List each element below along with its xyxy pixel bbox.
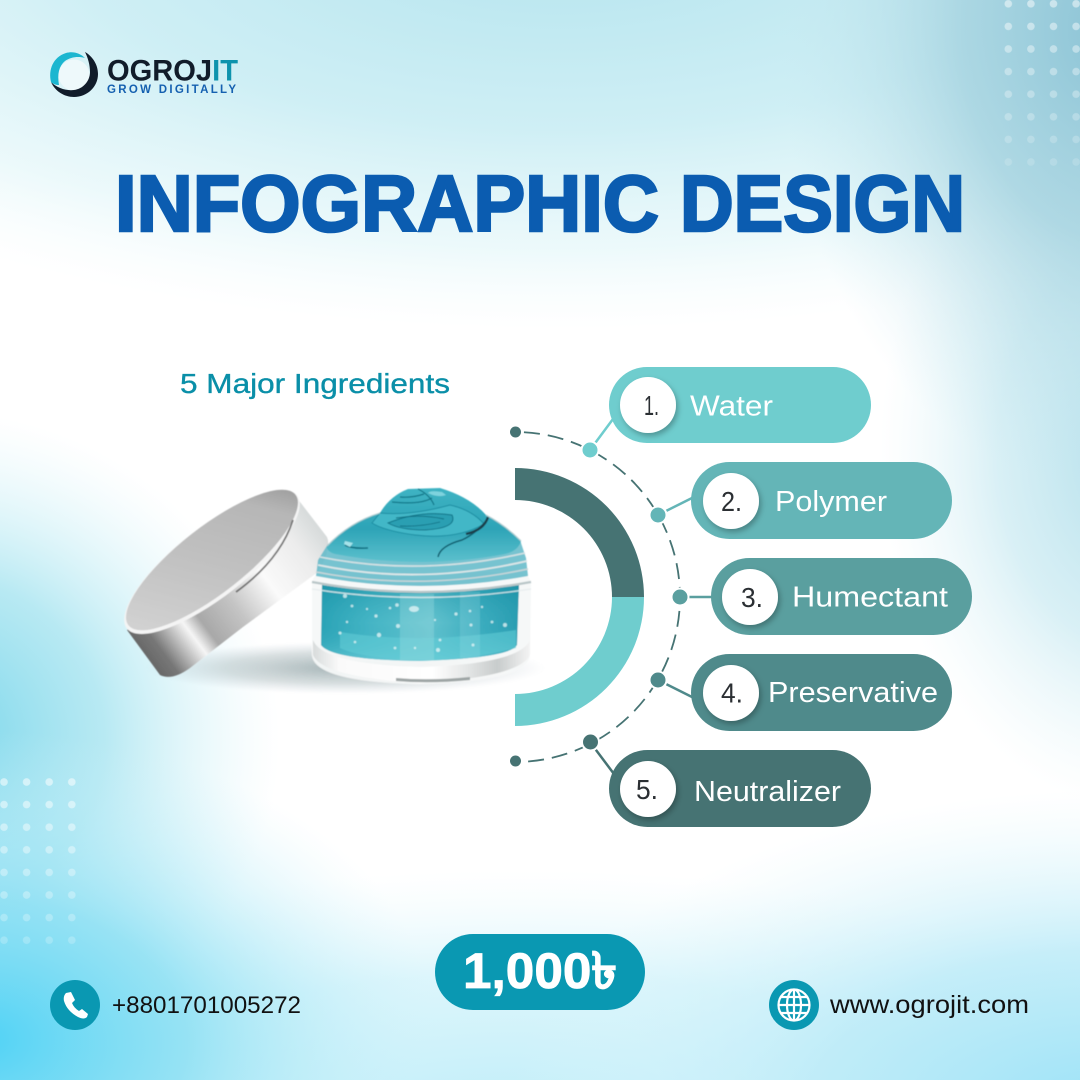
item 3: Humectant: Humectant [792,582,948,614]
product: gel jar with open lid [105,468,545,695]
item 2: Polymer: 2. [721,486,742,517]
item 1: Water: 1. [644,390,659,421]
item 2: Polymer [650,462,952,539]
decorative dot grid: top right [1004,0,1080,166]
title [115,159,965,248]
subtitle: 5 Major Ingredients: 5 Major Ingredients [180,368,450,399]
title: DESIGN [680,159,965,248]
price badge: 1,000৳ [463,943,617,999]
arc end dot bottom [510,756,521,766]
item 1: Water: Water [690,390,773,422]
contact: phone [50,980,301,1030]
item 3: Humectant: 3. [741,582,763,613]
ring: lower light segment [515,597,644,726]
item 1: Water [582,367,871,458]
item 3: Humectant [672,558,972,635]
website address: www.ogrojit.com [829,991,1029,1019]
jar shadow [145,640,545,695]
item 5: Neutralizer [582,734,871,827]
gel bubbles [338,594,507,652]
item 4: Preservative: 4. [721,678,743,708]
contact: website [769,980,1029,1030]
phone number: +8801701005272 [112,992,301,1019]
logo tagline: GROW DIGITALLY [107,84,236,96]
jar lid [105,468,328,677]
title: INFOGRAPHIC [115,159,659,248]
dashed arc connector [515,432,680,762]
item 4: Preservative [650,654,952,731]
gel dome swirl [327,488,521,562]
arc end dot top [510,426,521,438]
item 2: Polymer: Polymer [775,486,887,518]
jar neck threads [312,540,531,598]
item 5: Neutralizer: Neutralizer [694,776,841,808]
ring: upper dark segment [515,468,644,597]
gel in jar [321,585,519,661]
logo: OgrojIT [50,52,238,97]
icon: phone [50,980,100,1030]
item 4: Preservative: Preservative [768,677,938,709]
price badge [435,934,645,1010]
logo mark [50,52,98,97]
logo wordmark: OGROJIT [107,54,238,88]
jar body [312,572,531,684]
item 5: Neutralizer: 5. [636,774,658,805]
half-ring chart [515,468,644,726]
icon: globe [769,980,819,1030]
decorative dot grid: bottom left [0,778,76,944]
